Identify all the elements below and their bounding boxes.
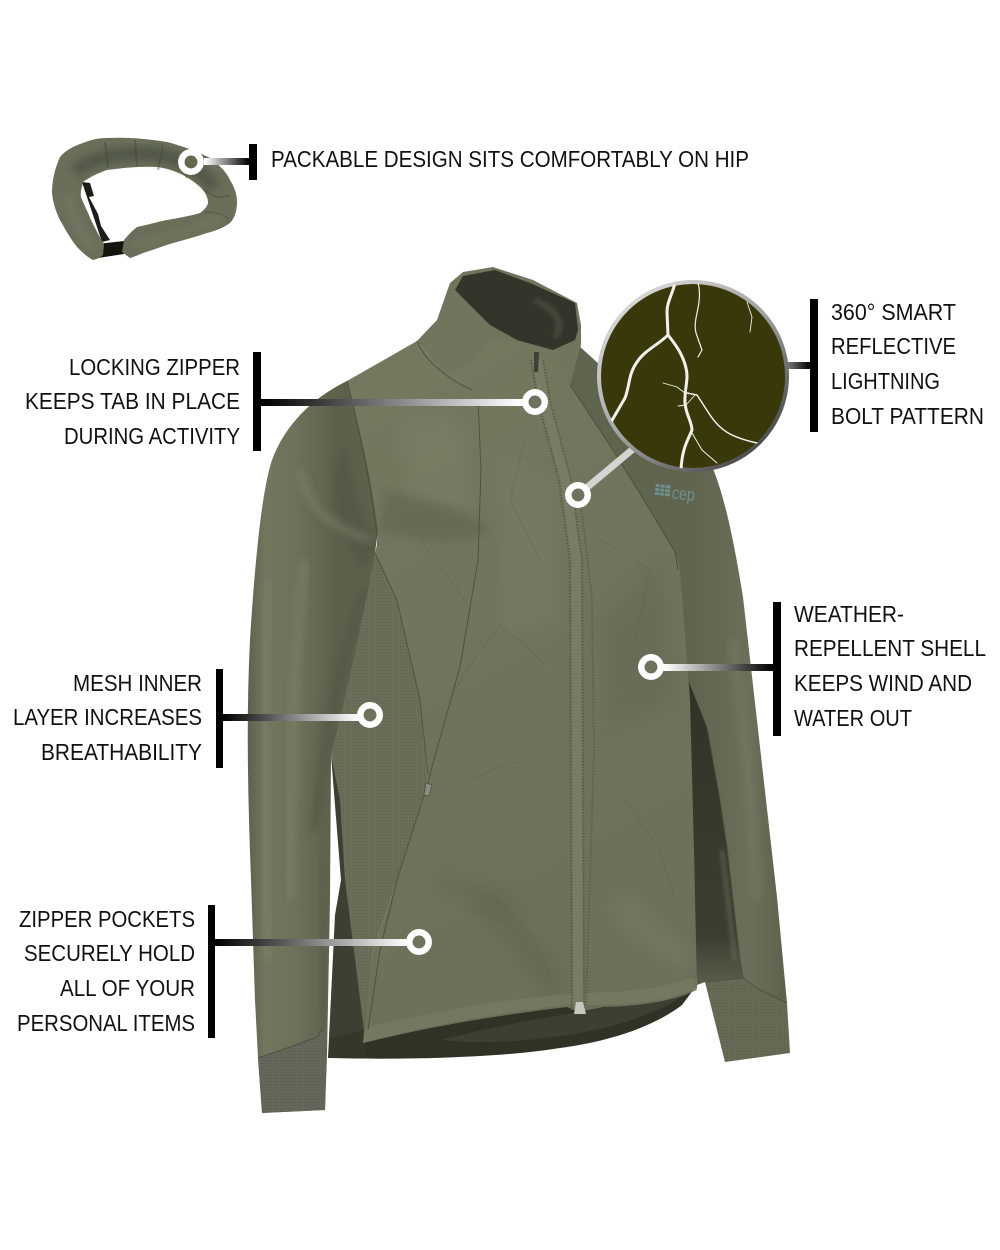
- logo wordmark: cep: [671, 483, 696, 505]
- callout: locking zipper: [25, 352, 545, 451]
- callout text: REFLECTIVE: [831, 333, 956, 359]
- jacket illustration: [248, 267, 790, 1113]
- leader line: [215, 939, 410, 946]
- infographic canvas: [14, 138, 986, 1113]
- divider bar: [810, 299, 818, 432]
- callout text: WATER OUT: [794, 705, 912, 731]
- main front body: [347, 340, 697, 1043]
- left sleeve: [248, 381, 378, 1113]
- divider bar: [208, 905, 215, 1038]
- callout text: PERSONAL ITEMS: [17, 1010, 195, 1036]
- callout text: KEEPS TAB IN PLACE: [25, 388, 240, 414]
- callout text: [794, 601, 986, 731]
- callout text: LOCKING ZIPPER: [69, 354, 240, 380]
- marker dot: [181, 152, 201, 172]
- front hem band: [363, 977, 697, 1043]
- callout text: [831, 299, 984, 429]
- packable belt-bag accessory: [52, 138, 237, 260]
- right cuff mesh: [705, 978, 790, 1062]
- callout: reflective lightning bolt pattern: [568, 280, 984, 505]
- callout text: [25, 354, 240, 449]
- jacket side shadow below left sleeve: [328, 755, 372, 1058]
- black strap inside band: [82, 182, 110, 242]
- divider bar: [253, 352, 261, 451]
- divider bar: [216, 669, 223, 768]
- right sleeve highlights: [733, 640, 758, 900]
- callout text: MESH INNER: [73, 670, 202, 696]
- leader line: [261, 399, 523, 406]
- callout: weather-repellent shell: [641, 601, 986, 736]
- jacket inner hem and back lining: [330, 960, 697, 1059]
- divider bar: [773, 602, 781, 736]
- leader line: [223, 714, 360, 721]
- chest logo: [654, 481, 696, 505]
- marker dot: [568, 485, 588, 505]
- left sleeve folds: [299, 463, 376, 827]
- right sleeve light sliver by mesh panel: [722, 850, 735, 960]
- jacket collar inner lining: [455, 270, 578, 350]
- callout: packable design: [181, 144, 749, 180]
- callout: mesh inner layer: [13, 669, 380, 768]
- black buckle strap: [97, 241, 124, 258]
- right side dark mesh panel: [684, 660, 743, 985]
- inner mesh lining visible at hem: [440, 992, 690, 1042]
- callout text: KEEPS WIND AND: [794, 670, 972, 696]
- packable band body: [52, 138, 237, 260]
- callout text: DURING ACTIVITY: [64, 423, 240, 449]
- divider bar: [249, 144, 257, 180]
- callout text: LIGHTNING: [831, 368, 940, 394]
- body folds and tonal veins: [380, 420, 690, 990]
- callout text: [13, 670, 202, 765]
- collar inner fold highlight: [535, 300, 559, 338]
- callout text: BREATHABILITY: [41, 739, 202, 765]
- marker dot: [360, 705, 380, 725]
- collar zipper pull: [534, 352, 539, 372]
- callout text: PACKABLE DESIGN SITS COMFORTABLY ON HIP: [271, 146, 749, 172]
- packable band shading: [72, 140, 230, 219]
- logo grid mark: [655, 484, 671, 496]
- left hem fold band: [328, 1030, 365, 1058]
- right sleeve: [568, 345, 790, 1062]
- marker dot: [525, 392, 545, 412]
- mesh side panel: [331, 553, 428, 1030]
- leader line: [204, 158, 250, 165]
- lightning bolt: [611, 283, 757, 470]
- marker dot: [409, 932, 429, 952]
- left cuff mesh: [258, 1028, 327, 1113]
- leader line to zipper marker: [584, 449, 633, 490]
- leader line to divider: [786, 362, 812, 369]
- callout text: BOLT PATTERN: [831, 403, 984, 429]
- callout: zipper pockets: [17, 905, 429, 1038]
- jacket collar outer: [417, 267, 581, 392]
- pocket zipper pull: [424, 783, 432, 796]
- callout text: ALL OF YOUR: [60, 975, 195, 1001]
- magnified fabric circle: [597, 280, 789, 472]
- callout text: WEATHER-: [794, 601, 904, 627]
- marker dot: [641, 657, 661, 677]
- callout text: 360° SMART: [831, 299, 956, 325]
- callout text: SECURELY HOLD: [24, 940, 195, 966]
- zipper: [531, 360, 594, 1014]
- leader line: [662, 664, 774, 671]
- callout text: ZIPPER POCKETS: [19, 906, 195, 932]
- jacket seams: [258, 341, 787, 1058]
- callout text: [17, 906, 195, 1036]
- callout text: LAYER INCREASES: [13, 704, 202, 730]
